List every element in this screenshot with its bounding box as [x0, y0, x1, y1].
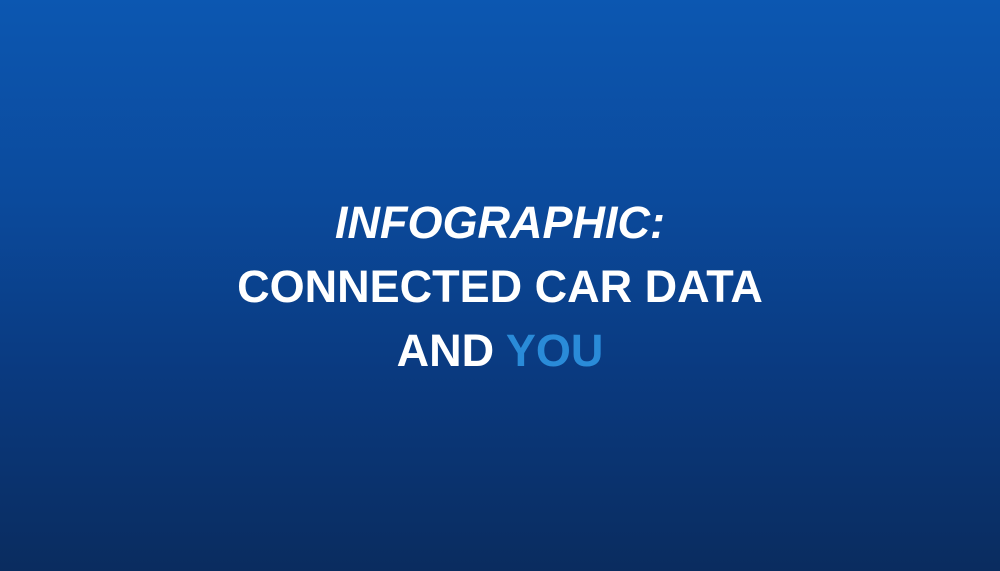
heading: infographic label: INFOGRAPHIC:	[335, 197, 665, 248]
heading: and you: AND YOU	[397, 325, 603, 376]
heading: connected car data: CONNECTED CAR DATA	[237, 261, 763, 312]
title	[237, 197, 763, 376]
